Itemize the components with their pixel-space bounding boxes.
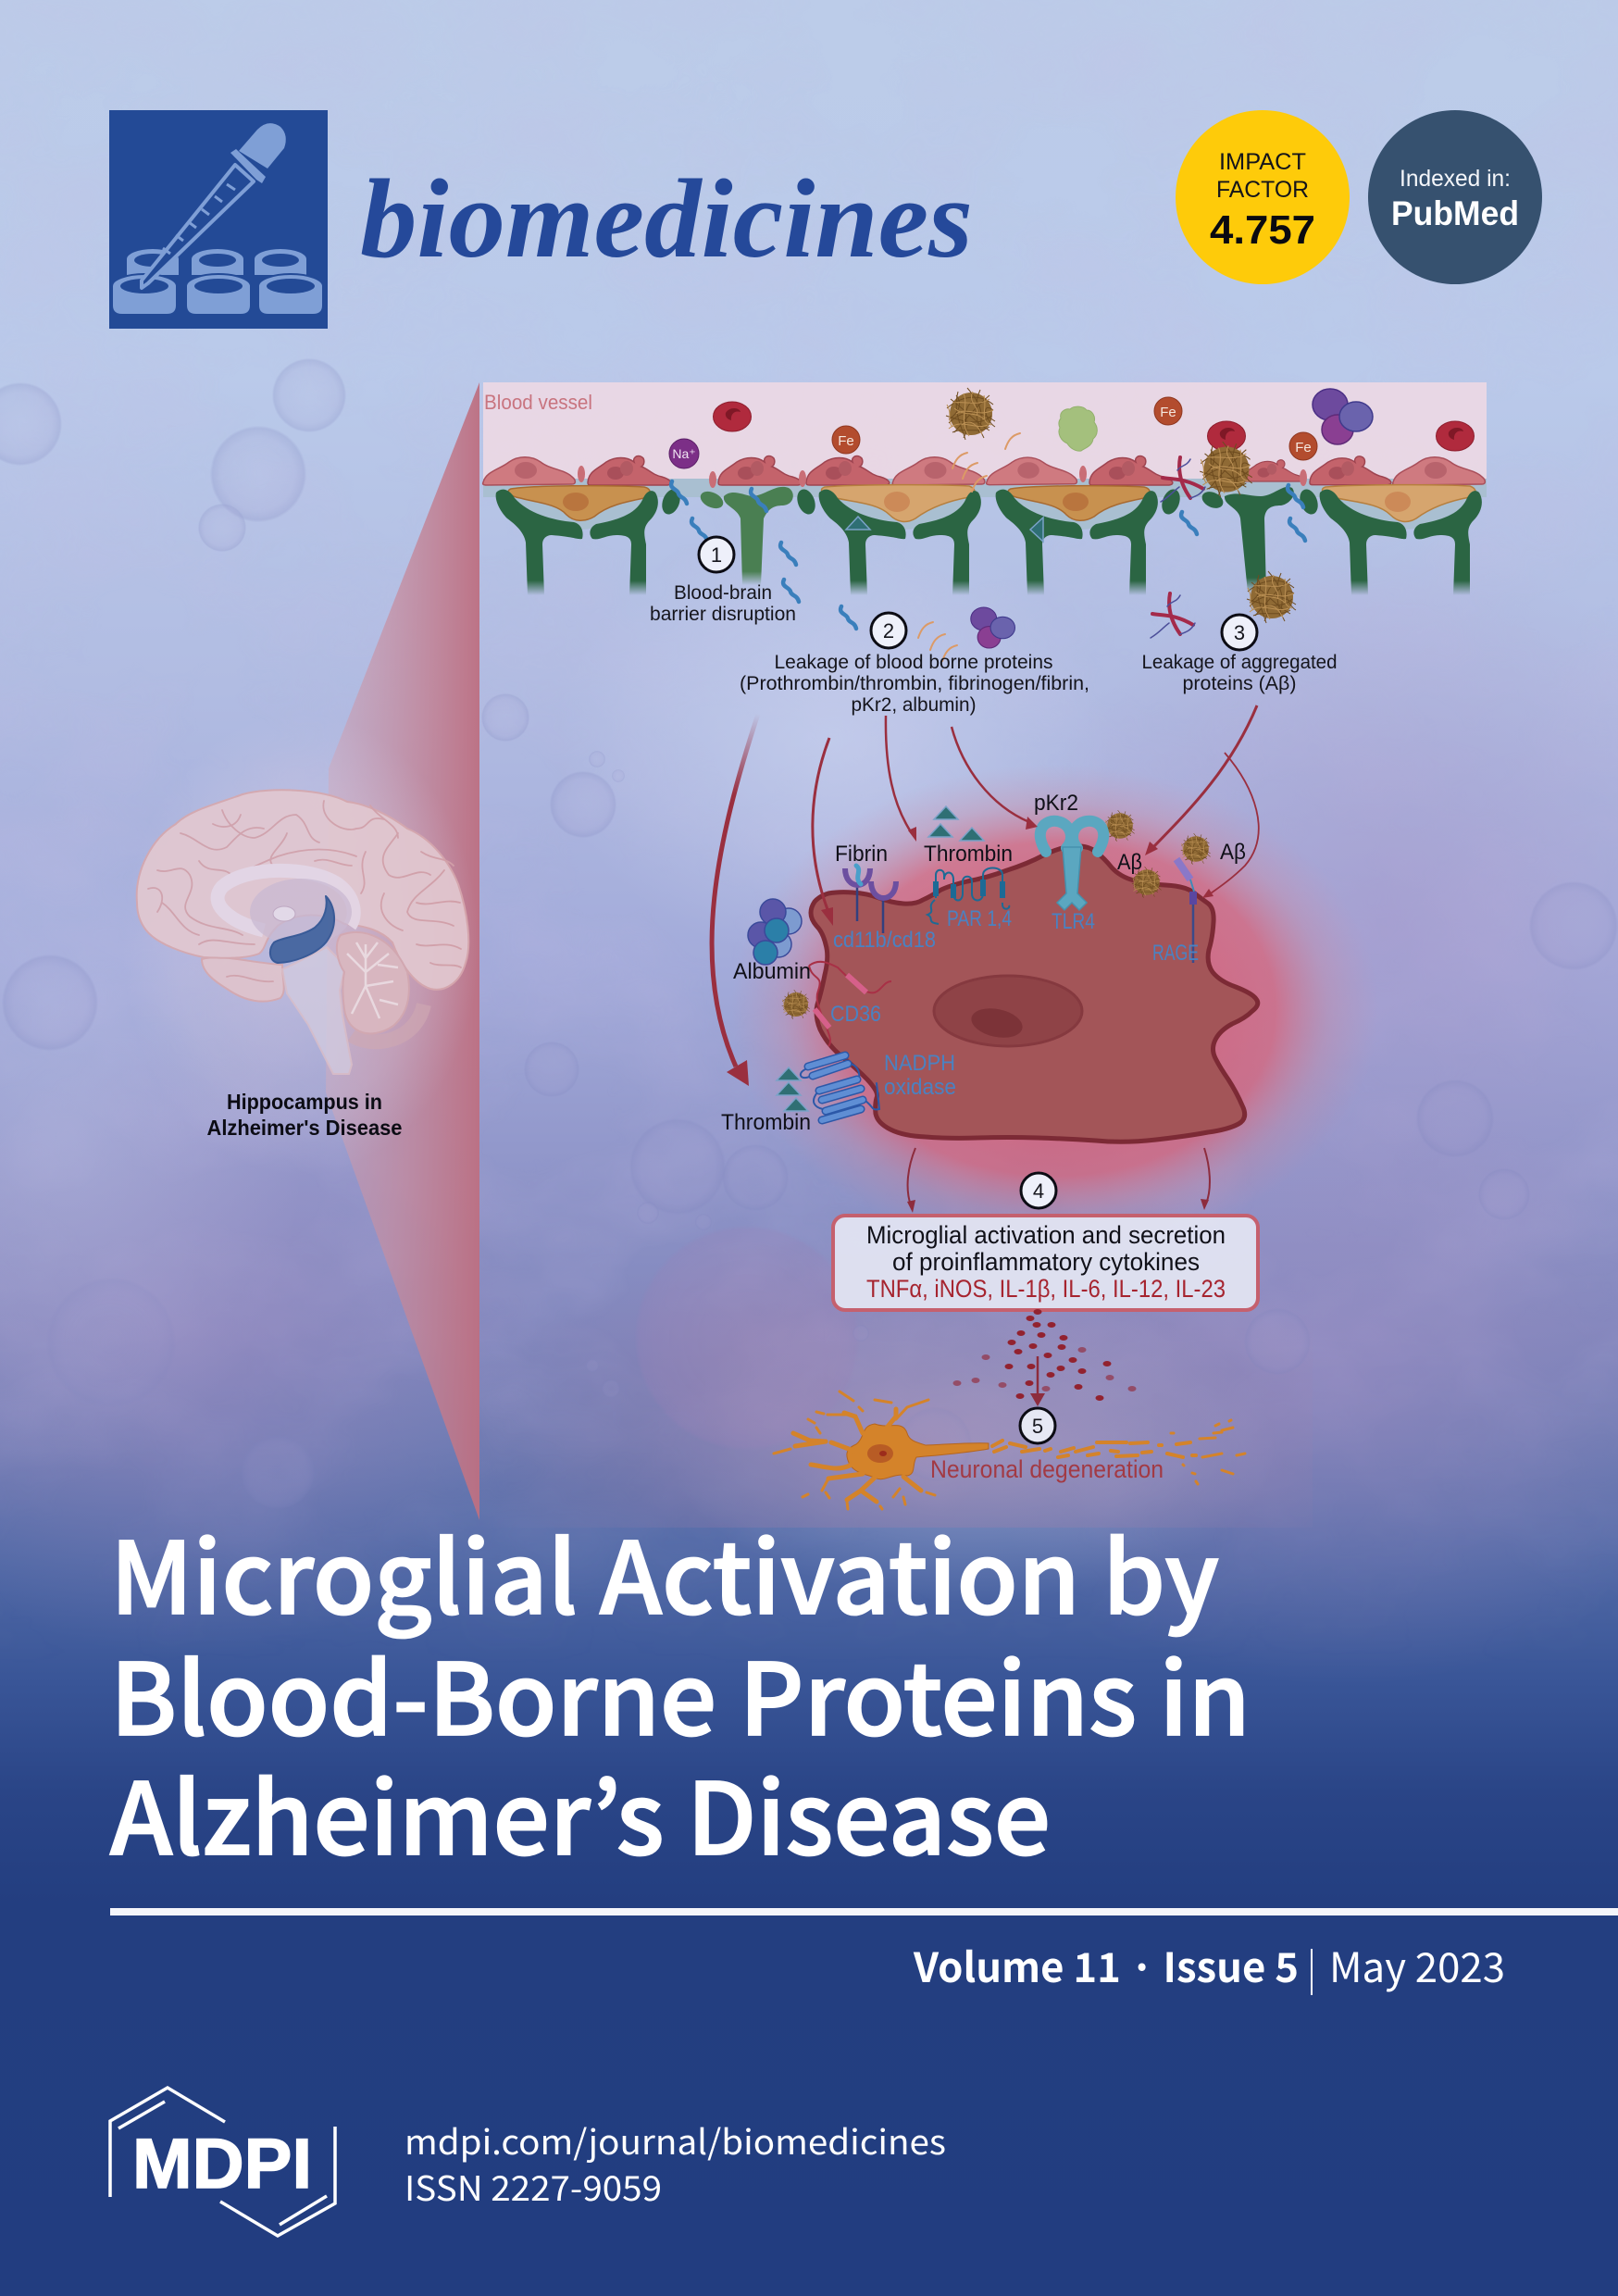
label: leakage of aggregated proteins: [1142, 652, 1337, 694]
icon: front row openings: [120, 279, 315, 293]
arrow to activation box, left: [907, 1148, 915, 1213]
icon: iron and sodium ions: Fe: [1160, 405, 1176, 420]
basement membrane lenses: [496, 480, 1483, 530]
panel: blood vessel band: [483, 382, 1487, 595]
icon: dropper tube: [142, 165, 254, 288]
step badge 4: 4: [1033, 1179, 1044, 1203]
arrow to thrombin receptor: [712, 714, 758, 1086]
icon: well plate front row: [112, 274, 323, 315]
journal logo icon: [109, 110, 328, 329]
icon: albumin: [748, 899, 802, 965]
receptor: NADPH oxidase: [801, 1055, 879, 1120]
microglia glow: [731, 764, 1379, 1254]
brain: brainstem: [282, 947, 352, 1074]
icon: dropper bulb: [239, 123, 286, 168]
step badge 2: [871, 613, 906, 648]
issue line: Volume 11 · Issue 5: [913, 1935, 1299, 1994]
neuron dendrites and fragments: [774, 1391, 1245, 1509]
labels: proteins in black: [721, 791, 1246, 1135]
zoom wedge from hippocampus to diagram: [326, 382, 479, 1520]
cytokine particles: [953, 1309, 1137, 1401]
panel: brain illustration: [137, 790, 468, 1074]
brain: inner midbrain: [250, 879, 352, 945]
neuron illustration: [774, 1391, 1245, 1509]
callout: microglial activation box: of proinflammatory cytokines: [892, 1248, 1200, 1276]
neuron nucleus: [867, 1444, 893, 1463]
brain: cerebellum branches: [347, 942, 398, 1018]
background bubbles: [0, 358, 1618, 1509]
labels: receptors in blue: TLR4: [1052, 909, 1095, 934]
labels: receptors in blue: oxidase: [884, 1075, 956, 1100]
labels: proteins in black: pKr2: [1034, 791, 1078, 816]
labels: proteins in black: Albumin: [733, 959, 811, 984]
soft veil behind brain: [122, 713, 479, 1176]
neuron nucleolus: [879, 1451, 887, 1456]
brain: corpus callosum: [218, 870, 354, 930]
icon: fibrin fibres: [1151, 457, 1205, 638]
badge: PubMed: [1368, 110, 1542, 284]
icon: iron and sodium ions: [669, 397, 1317, 468]
microglia cell: [811, 846, 1258, 1142]
labels: receptors in blue: cd11b/cd18: [833, 928, 936, 953]
step badge 1: [699, 537, 734, 572]
journal url and ISSN: [404, 2115, 946, 2211]
label: leakage of blood borne proteins: (Prothrombin/thrombin, fibrinogen/fibrin,: [740, 673, 1089, 694]
arrow to amyloid at surface: [1145, 705, 1257, 855]
step badge 4: [1021, 1173, 1056, 1208]
microglia nucleus: [934, 976, 1082, 1046]
caption: hippocampus: Alzheimer's Disease: [207, 1116, 402, 1140]
receptor: TLR4: [1040, 821, 1103, 910]
icon: purple protein trimers: [971, 389, 1373, 648]
label: neuronal degeneration: Neuronal degeneration: [930, 1455, 1164, 1483]
MDPI logo: [110, 2088, 335, 2236]
logo background: [109, 110, 328, 329]
icon: iron and sodium ions: Na⁺: [672, 446, 696, 461]
icon: iron and sodium ions: Fe: [838, 433, 854, 449]
icon: green protein: [1059, 406, 1097, 451]
badge: PubMed: Indexed in:: [1400, 166, 1511, 192]
caption: hippocampus: Hippocampus in: [227, 1090, 382, 1114]
icon: aggregated protein tangles: [782, 388, 1296, 1019]
labels: proteins in black: Aβ: [1220, 840, 1246, 865]
endothelial cells: [483, 455, 1485, 488]
arrow to neuron: [1030, 1356, 1045, 1406]
icon: red blood cells: [713, 402, 1474, 451]
label: blood-brain barrier disruption: barrier disruption: [650, 604, 796, 625]
step badge 3: 3: [1234, 621, 1245, 644]
receptor: CD36: [809, 962, 891, 1046]
label: blood-brain barrier disruption: Blood-brain: [674, 582, 772, 604]
icon: dropper scale ticks: [163, 184, 235, 254]
brain: temporal lobe: [202, 957, 284, 1002]
background: [0, 0, 1618, 1791]
brain: cerebellum: [337, 932, 409, 1033]
arrow to fibrin receptor: [813, 738, 833, 926]
label: leakage of aggregated proteins: Leakage of aggregated: [1142, 652, 1337, 673]
icon: small orange peptides: [918, 433, 1020, 661]
label: leakage of blood borne proteins: Leakage of blood borne proteins: [774, 652, 1053, 673]
arrow to activation box, right: [1201, 1148, 1210, 1210]
labels: proteins in black: Fibrin: [835, 842, 888, 867]
badge: impact factor: [1176, 110, 1350, 284]
arrow to thrombin: [886, 716, 916, 842]
brain: gyri: [148, 801, 461, 981]
callout: microglial activation box: [833, 1216, 1258, 1310]
broken endfoot, left: [659, 487, 818, 585]
logo wordmark: MDPI: [132, 2125, 312, 2203]
arrows: pathways into microglia: [712, 705, 1259, 1406]
labels: proteins in black: Thrombin: [924, 842, 1013, 867]
issue line: [913, 1935, 1505, 1995]
issue line: May 2023: [1329, 1935, 1505, 1994]
label: leakage of blood borne proteins: pKr2, albumin): [852, 694, 976, 716]
badge: PubMed: PubMed: [1391, 194, 1519, 232]
callout: microglial activation box: TNFα, iNOS, IL-1β, IL-6, IL-12, IL-23: [866, 1275, 1226, 1303]
label: leakage of aggregated proteins: proteins (Aβ): [1183, 673, 1296, 694]
receptor: cd11b/cd18: [845, 866, 896, 933]
icon: well plate back row: [127, 249, 306, 275]
labels: receptors in blue: RAGE: [1152, 941, 1199, 966]
badge: impact factor: FACTOR: [1216, 177, 1309, 203]
icon: leaked blue proteins: [671, 481, 1305, 629]
arrow to RAGE: [1202, 753, 1259, 898]
pericytes: [508, 485, 1475, 521]
brain: hippocampus: [270, 896, 334, 963]
brain: cerebellum fold: [352, 1004, 424, 1042]
step badge 3: [1222, 615, 1257, 650]
labels: receptors in blue: PAR 1,4: [947, 906, 1012, 931]
icon: back row openings: [134, 254, 299, 267]
neuron soma and axon: [847, 1424, 989, 1479]
step badge 1: 1: [711, 543, 722, 567]
journal url and ISSN: mdpi.com/journal/biomedicines: [404, 2115, 946, 2165]
icon: thrombin triangles: [777, 517, 1043, 1111]
title: Blood-Borne Proteins in: [110, 1620, 1251, 1764]
icon: dropper collar: [230, 149, 266, 183]
basement membrane band: [483, 479, 1487, 497]
brain: thalamus spot: [273, 906, 295, 921]
icon: iron and sodium ions: Fe: [1295, 440, 1312, 455]
brain: cerebrum: [137, 790, 468, 990]
caption: hippocampus: [207, 1090, 402, 1140]
label: blood-brain barrier disruption: [650, 582, 796, 625]
labels: proteins in black: Aβ: [1117, 850, 1142, 875]
logo hexagon outline: [110, 2088, 335, 2236]
badge: impact factor: 4.757: [1210, 207, 1315, 253]
label: blood vessel: Blood vessel: [484, 391, 592, 414]
broken endfoot, right: [1159, 487, 1321, 593]
step badge 5: 5: [1032, 1415, 1043, 1438]
journal url and ISSN: ISSN 2227-9059: [404, 2161, 662, 2211]
title: [110, 1499, 1251, 1883]
receptor: PAR 1,4: [927, 868, 1009, 924]
badge: impact factor: IMPACT: [1219, 149, 1306, 175]
journal name: biomedicines: [360, 156, 973, 281]
labels: receptors in blue: NADPH: [884, 1051, 955, 1076]
labels: proteins in black: Thrombin: [721, 1110, 811, 1135]
title: Microglial Activation by: [110, 1499, 1219, 1642]
title rule: [110, 1908, 1618, 1915]
step badge 2: 2: [883, 619, 894, 643]
callout: microglial activation box: Microglial activation and secretion: [866, 1221, 1226, 1249]
astrocyte endfeet: [496, 490, 1482, 595]
labels: receptors in blue: [830, 906, 1199, 1100]
labels: receptors in blue: CD36: [830, 1002, 881, 1027]
arrow to pKr2 receptor: [952, 727, 1038, 830]
receptor: RAGE: [1176, 859, 1197, 963]
title: Alzheimer’s Disease: [110, 1740, 1051, 1883]
step badge 5: [1020, 1408, 1055, 1443]
vessel lumen: [483, 382, 1487, 479]
label: leakage of blood borne proteins: [740, 652, 1089, 716]
